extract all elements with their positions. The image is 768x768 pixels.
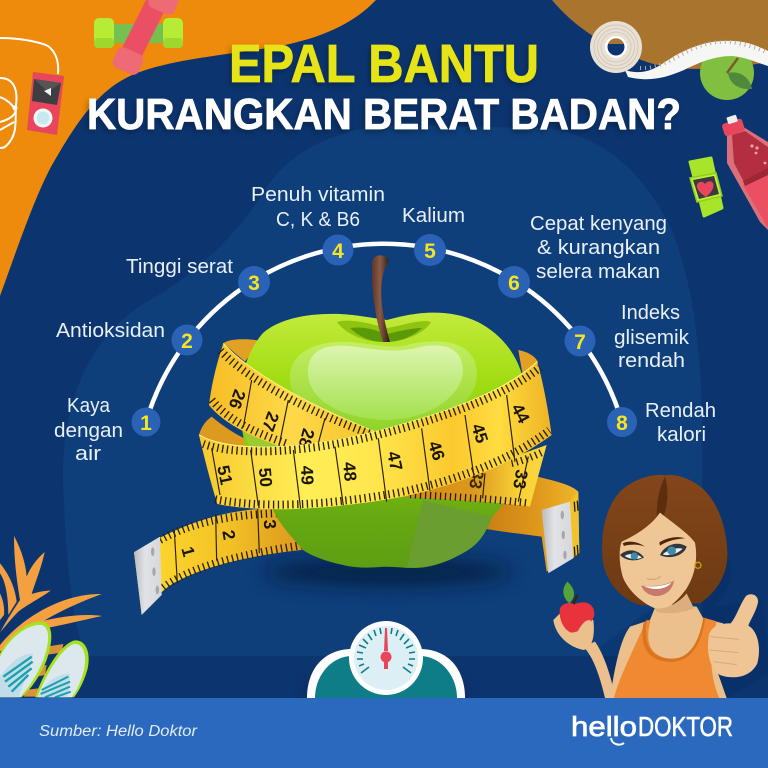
label 6	[530, 213, 667, 283]
apple dimple	[337, 321, 431, 342]
icon: green dumbbell	[94, 18, 183, 48]
marker 4: 4	[332, 240, 344, 263]
tape: front band	[199, 362, 552, 509]
marker 1: 1	[140, 412, 152, 435]
woman: hand and red apple	[553, 582, 594, 650]
hello doktor logo: DOKTOR	[638, 711, 733, 742]
tape tail: left: 1	[177, 544, 199, 559]
label 8: kalori	[657, 424, 706, 446]
apple shadow	[263, 558, 513, 586]
icon: plant leaves	[0, 536, 102, 652]
measuring tape wrapped round apple	[199, 343, 552, 509]
apple left shade	[240, 365, 310, 470]
icon: tape measure roll	[590, 21, 768, 79]
marker 5: 5	[424, 240, 436, 263]
hello doktor logo	[571, 711, 733, 745]
footer bar	[0, 698, 768, 768]
arc of benefits	[132, 234, 637, 437]
scale dial	[349, 621, 423, 695]
title	[87, 34, 681, 139]
marker 3: 3	[248, 272, 260, 295]
woman giving thumbs up with red apple	[553, 475, 768, 698]
label 4	[251, 184, 385, 231]
tape: lower right band: 33	[465, 468, 488, 491]
brown corner shape	[552, 0, 768, 69]
tape back: left upper	[223, 339, 261, 362]
label 1: dengan	[54, 420, 123, 442]
green apple	[240, 255, 527, 568]
tape: upper band: 28	[294, 426, 319, 451]
tape: front band: 48	[339, 461, 361, 482]
tape back: upper right	[518, 350, 538, 378]
label 2: Antioksidan	[56, 320, 165, 342]
label 7: glisemik	[614, 327, 690, 349]
icon: red dumbbell	[111, 0, 182, 77]
tape: front band: 50	[255, 467, 276, 488]
marker 2	[172, 324, 202, 356]
woman: orange top	[614, 618, 719, 698]
source text: Sumber: Hello Doktor	[39, 723, 198, 740]
woman: mouth	[641, 581, 674, 596]
icon: drink bottle	[721, 115, 768, 230]
hello doktor logo: hello	[571, 711, 637, 742]
woman: eyes	[620, 550, 644, 560]
apple face	[290, 341, 477, 432]
white arc	[146, 244, 622, 422]
woman: neck shade	[655, 593, 694, 613]
tape tail: right	[483, 474, 579, 573]
woman: earring	[695, 562, 701, 568]
tape: lower right band	[403, 445, 547, 507]
woman: face	[620, 513, 696, 609]
lighter blue background blob	[63, 125, 702, 656]
woman: thumbs up hand	[708, 594, 759, 677]
woman: hair	[602, 475, 727, 605]
tape: upper band: 27	[258, 409, 283, 434]
woman: torso	[610, 603, 727, 698]
label 1	[54, 395, 123, 465]
orange corner shape	[0, 0, 376, 296]
title line 2: KURANGKAN BERAT BADAN?	[87, 90, 681, 139]
marker 4	[322, 234, 354, 266]
tape: front band: 46	[424, 438, 449, 463]
tape tail: left: 3	[260, 519, 280, 530]
woman: eyebrows	[623, 537, 685, 547]
tape: upper band	[209, 343, 375, 453]
marker 8: 8	[616, 412, 628, 435]
tape: front band: 45	[467, 421, 493, 446]
icon: sneakers	[0, 622, 89, 697]
icon: smartwatch	[690, 158, 722, 216]
marker 6	[498, 266, 530, 298]
label 7: Indeks	[621, 302, 680, 324]
label 7: rendah	[618, 350, 685, 372]
tape: front band: 47	[383, 449, 407, 472]
label 7	[614, 302, 690, 372]
label 1: Kaya	[67, 395, 111, 417]
label 3: Tinggi serat	[126, 256, 233, 278]
marker 1	[132, 408, 160, 436]
marker 6: 6	[508, 272, 520, 295]
apple highlight	[308, 345, 463, 420]
tape tail: left: 2	[218, 528, 240, 541]
woman: arm holding apple	[583, 642, 615, 698]
marker 3	[238, 266, 270, 298]
label 8: Rendah	[645, 400, 716, 422]
label 6: Cepat kenyang	[530, 213, 667, 235]
scale body	[307, 649, 465, 698]
title line 1: EPAL BANTU	[229, 34, 539, 94]
scale shadow	[296, 660, 476, 720]
woman shadow	[600, 553, 768, 697]
tape tail: left	[134, 508, 307, 615]
tape: front band: 51	[213, 463, 237, 487]
marker 2: 2	[181, 330, 193, 353]
marker 7	[564, 326, 596, 356]
label 1: air	[75, 443, 101, 465]
label 4: Penuh vitamin	[251, 184, 385, 206]
marker 5	[414, 234, 446, 266]
tape: upper band: 26	[225, 387, 250, 412]
label 8	[645, 400, 716, 446]
tape: front band: 44	[507, 400, 534, 427]
icon: small green apple	[700, 46, 754, 100]
tape: front band: 49	[297, 465, 318, 485]
tape back: left inner	[199, 417, 247, 452]
label 6: & kurangkan	[537, 237, 660, 259]
label 6: selera makan	[536, 261, 660, 283]
tape back pieces	[134, 339, 579, 615]
apple body	[240, 313, 527, 568]
icon: weighing scale	[296, 621, 476, 720]
tape: lower right band: 33	[509, 468, 532, 491]
icon: music player with earphones	[0, 38, 64, 148]
apple lower right facet	[407, 500, 492, 567]
marker 7: 7	[574, 331, 586, 354]
apple stem	[372, 255, 390, 342]
label 5: Kalium	[402, 205, 465, 227]
marker 8	[607, 407, 637, 437]
woman: nose	[647, 576, 661, 579]
label 4: C, K & B6	[276, 209, 360, 231]
